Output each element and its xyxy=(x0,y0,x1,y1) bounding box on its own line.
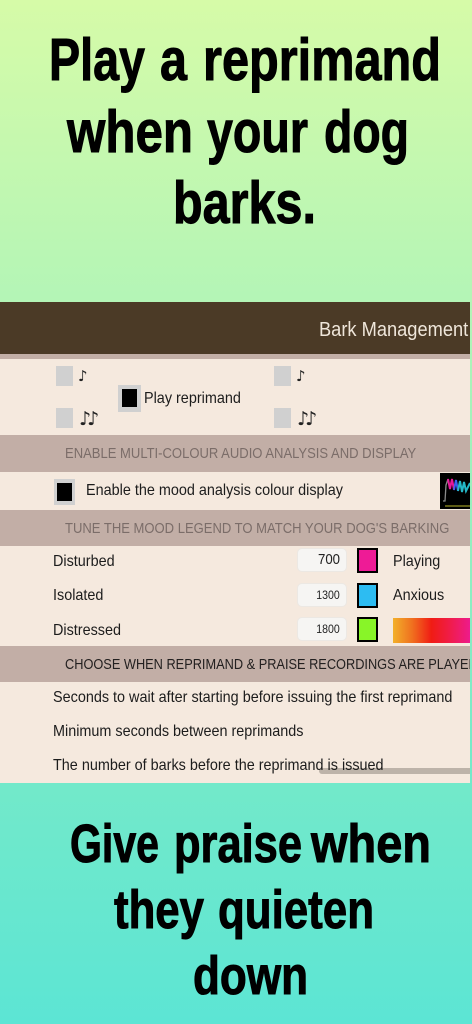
mood legend rows: 1300 xyxy=(317,588,340,602)
scrollbar xyxy=(319,768,470,774)
settings text rows: Seconds to wait after starting before issuing the first reprimand xyxy=(53,689,452,706)
mood legend rows: Isolated xyxy=(53,587,103,604)
mood legend rows: Distressed xyxy=(53,622,121,639)
settings text rows: The number of barks before the reprimand is issued xyxy=(53,757,384,774)
mood legend rows: 1800 xyxy=(317,622,340,636)
group: play reprimand checkboxes: Play reprimand xyxy=(144,390,241,407)
panel: bark management settings xyxy=(0,302,470,783)
mood legend rows: Disturbed xyxy=(53,553,115,570)
heading: give praise: praise xyxy=(174,814,302,874)
section band: tune the mood legend xyxy=(0,510,470,546)
heading: play a reprimand: dog xyxy=(324,99,409,165)
mood legend rows: Playing xyxy=(393,553,440,570)
heading: play a reprimand: a xyxy=(160,27,188,93)
group: play reprimand checkboxes: ♪ xyxy=(296,367,306,385)
mood legend rows xyxy=(53,548,470,643)
section band: tune the mood legend: TUNE THE MOOD LEGEND TO MATCH YOUR DOG'S BARKING xyxy=(65,521,449,537)
mood legend rows: 700 xyxy=(318,551,340,568)
heading: play a reprimand xyxy=(49,27,441,236)
heading: give praise xyxy=(70,814,431,1006)
mood legend rows: Anxious xyxy=(393,587,444,604)
heading: play a reprimand: Play xyxy=(49,27,145,93)
header divider strip xyxy=(0,354,470,359)
row: mood analysis colour display: Enable the mood analysis colour display xyxy=(86,482,343,499)
heading: play a reprimand: barks. xyxy=(173,170,316,236)
header title: Bark Management xyxy=(319,319,468,341)
group: play reprimand checkboxes: ♪♪ xyxy=(297,408,313,430)
heading: give praise: quieten xyxy=(218,880,374,940)
heading: give praise: Give xyxy=(70,814,159,874)
settings text rows xyxy=(53,689,470,774)
section band: multi-colour audio xyxy=(0,435,470,472)
group: play reprimand checkboxes: ♪ xyxy=(78,367,88,385)
icon: mood waveform thumbnail xyxy=(440,473,470,509)
heading: give praise: they xyxy=(114,880,204,940)
section band: choose when recordings are played: CHOOSE WHEN REPRIMAND & PRAISE RECORDINGS ARE PLAYED xyxy=(65,657,470,673)
colour gradient legend xyxy=(393,618,470,643)
group: play reprimand checkboxes xyxy=(56,366,316,430)
section band: multi-colour audio: ENABLE MULTI-COLOUR AUDIO ANALYSIS AND DISPLAY xyxy=(65,446,416,462)
heading: give praise: when xyxy=(310,814,431,874)
heading: play a reprimand: your xyxy=(207,99,308,165)
group: play reprimand checkboxes: ♪♪ xyxy=(79,408,95,430)
header bar xyxy=(0,302,470,354)
section band: choose when recordings are played xyxy=(0,646,470,682)
heading: play a reprimand: when xyxy=(66,99,193,165)
settings text rows: Minimum seconds between reprimands xyxy=(53,723,304,740)
row: mood analysis colour display xyxy=(54,473,470,509)
heading: give praise: down xyxy=(193,946,308,1006)
